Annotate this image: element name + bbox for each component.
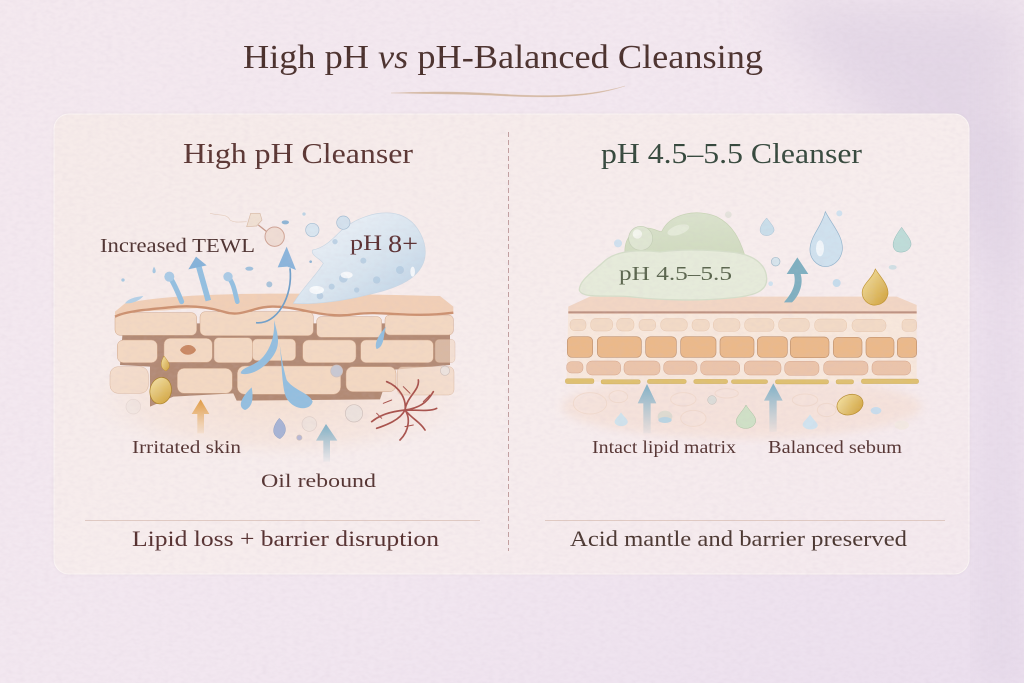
arrow: balanced sebum (764, 383, 783, 432)
icon: irritated capillary (372, 380, 437, 440)
damaged cell (180, 345, 196, 355)
label: increased TEWL: Increased TEWL (100, 235, 255, 257)
skin surface (115, 294, 453, 317)
label: pH 8+ (350, 230, 418, 258)
title underline flourish (391, 86, 625, 97)
central curved arrow (256, 268, 290, 323)
middle row cells (567, 337, 917, 358)
dermis haze (562, 375, 922, 438)
icon: foam pH 8+ (293, 213, 425, 304)
arrow: oil rebound (316, 424, 337, 462)
lower droplets (615, 396, 909, 430)
bubbles and molecule (121, 212, 350, 303)
small debris bubbles (126, 365, 450, 440)
label: oil rebound: Oil rebound (261, 471, 377, 492)
icon: oil drops (161, 356, 169, 371)
panel: pH 4.5-5.5 cleanser (545, 139, 945, 551)
divider (85, 520, 480, 522)
divider (545, 520, 945, 522)
label: pH 8+: pH (350, 230, 382, 255)
label: intact lipid matrix: Intact lipid matrix (592, 437, 736, 457)
arrow: irritated skin (192, 399, 209, 433)
icon: water drops (614, 210, 911, 287)
arrow: intact lipid matrix (638, 384, 656, 433)
caption: high pH result: Lipid loss + barrier disruption (132, 526, 439, 551)
arrow: moisture retained (784, 257, 808, 302)
mortar (120, 323, 450, 407)
lipid layer (565, 379, 919, 384)
label: balanced sebum: Balanced sebum (768, 437, 902, 457)
top row cells (570, 318, 917, 332)
heading: balanced cleanser: pH 4.5–5.5 Cleanser (601, 139, 863, 170)
arrows: TEWL water loss (170, 265, 237, 302)
panel: comparison card (54, 114, 969, 574)
stratum surface (568, 297, 917, 314)
lower row cells (567, 361, 911, 375)
label: irritated skin: Irritated skin (132, 437, 241, 457)
caption: balanced result: Acid mantle and barrier preserved (570, 526, 907, 551)
icon: green foam (579, 213, 767, 300)
heading: high pH cleanser: High pH Cleanser (183, 139, 414, 170)
title: High pH vs pH-Balanced Cleansing (243, 39, 763, 76)
water streams through barrier (241, 320, 278, 374)
icon: oil capsule (834, 391, 866, 418)
label: foam pH: pH 4.5–5.5 (619, 263, 732, 285)
label: pH 8+: 8+ (388, 231, 418, 258)
centre dashed divider (508, 132, 510, 551)
icon: oil drop top (862, 269, 888, 305)
skin bricks (110, 312, 455, 395)
subcutaneous cells (573, 389, 836, 426)
illustration: disrupted skin barrier (83, 212, 477, 462)
skin base (567, 297, 917, 382)
panel: high pH cleanser (83, 139, 480, 551)
halo below skin (83, 340, 477, 460)
illustration: intact skin barrier (562, 210, 922, 438)
